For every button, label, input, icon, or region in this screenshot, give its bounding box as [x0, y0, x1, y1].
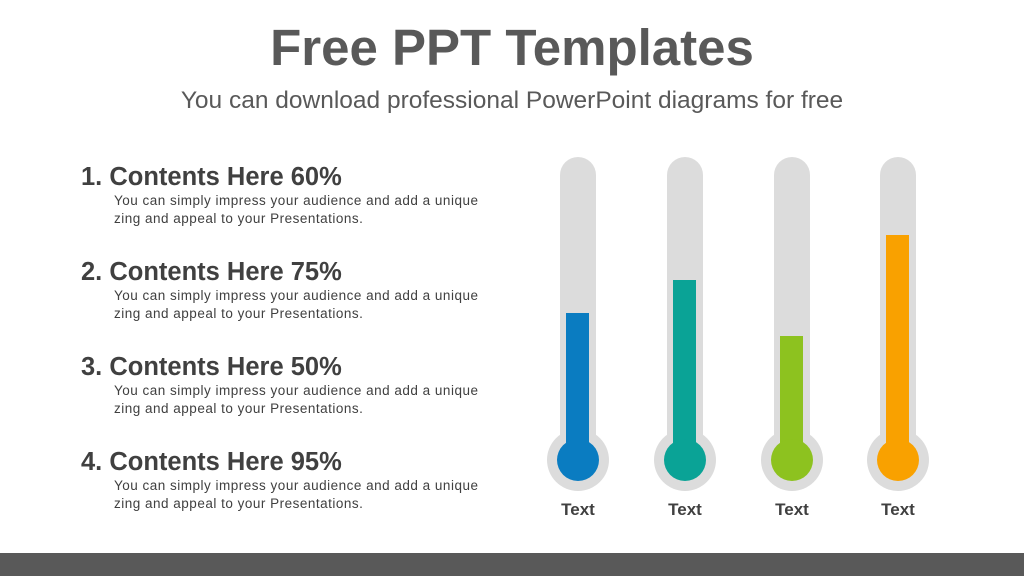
- item 2: [81, 258, 478, 321]
- thermometer 3: [761, 157, 823, 491]
- thermometer 4: [867, 157, 929, 491]
- title: Free PPT Templates: [270, 19, 754, 76]
- item 1: You can simply impress your audience and add a unique zing and appeal to your Presentations.: [114, 193, 478, 226]
- item 2: 2. Contents Here 75%: [81, 258, 342, 286]
- thermometer 1: [547, 157, 609, 491]
- item 4: [81, 448, 478, 511]
- item 3: You can simply impress your audience and add a unique zing and appeal to your Presentations.: [114, 383, 478, 416]
- footer bar: [0, 553, 1024, 576]
- item 1: 1. Contents Here 60%: [81, 163, 342, 191]
- label 4: Text: [881, 500, 915, 519]
- thermometer 2: [654, 157, 716, 491]
- subtitle: You can download professional PowerPoint diagrams for free: [181, 87, 843, 114]
- item 4: You can simply impress your audience and add a unique zing and appeal to your Presentations.: [114, 478, 478, 511]
- item 1: [81, 163, 478, 226]
- item 3: [81, 353, 478, 416]
- label 2: Text: [668, 500, 702, 519]
- item 3: 3. Contents Here 50%: [81, 353, 342, 381]
- item 4: 4. Contents Here 95%: [81, 448, 342, 476]
- label 1: Text: [561, 500, 595, 519]
- item 2: You can simply impress your audience and add a unique zing and appeal to your Presentations.: [114, 288, 478, 321]
- label 3: Text: [775, 500, 809, 519]
